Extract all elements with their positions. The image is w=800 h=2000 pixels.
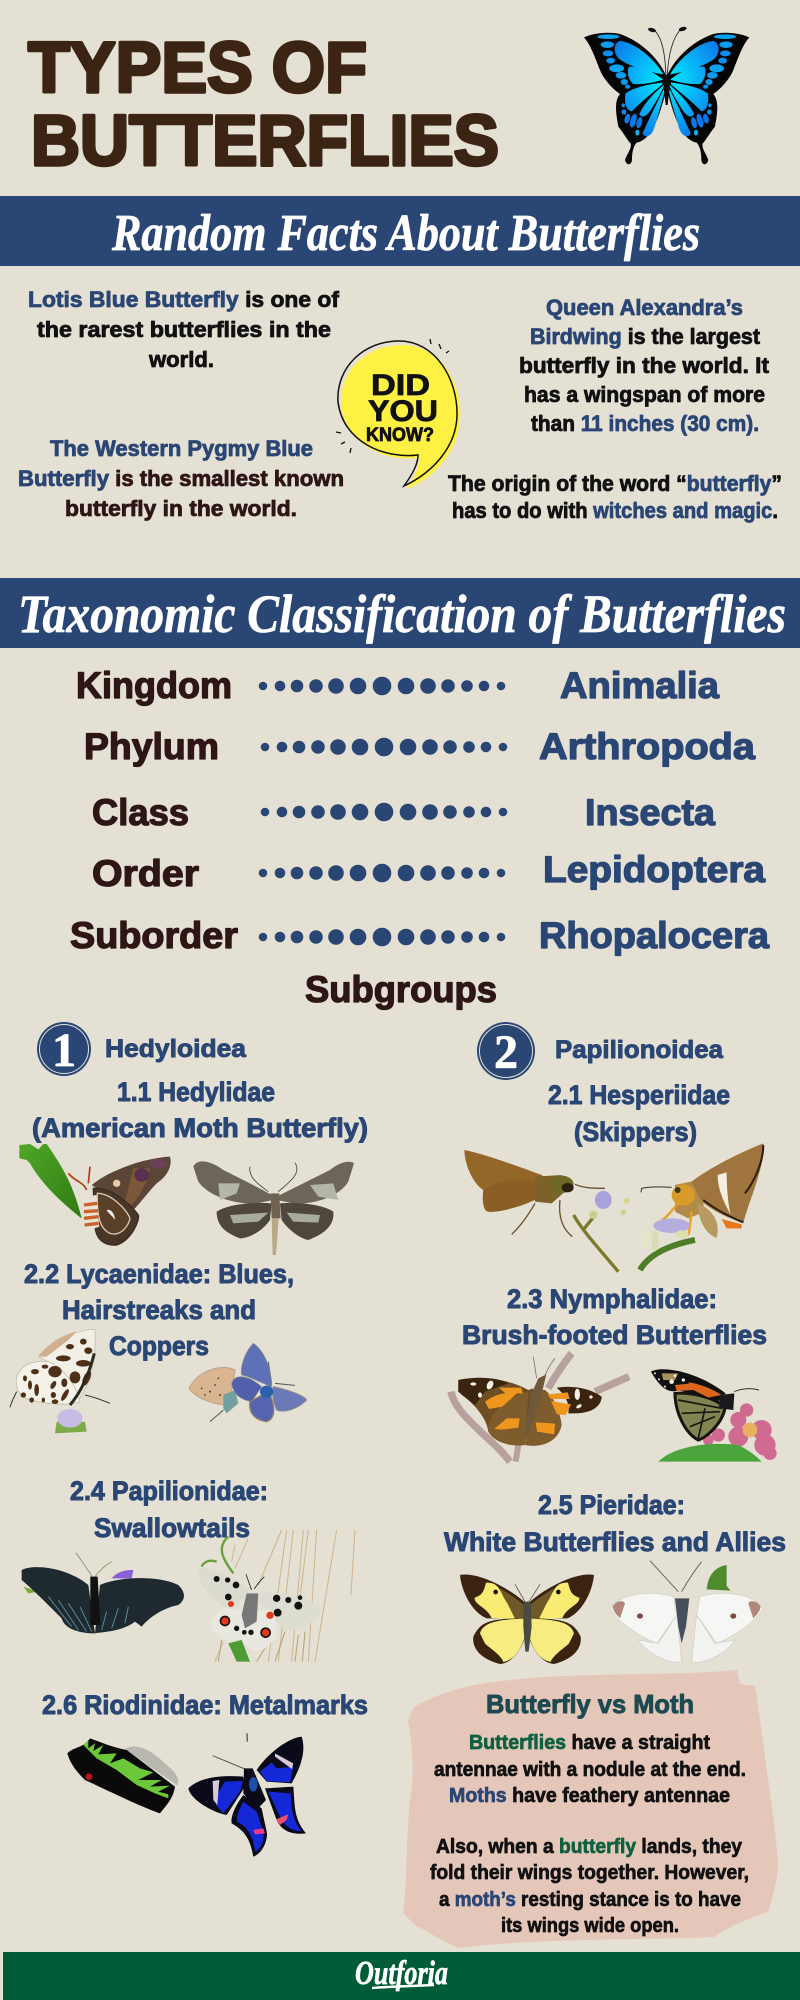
heading: 1.1 Hedylidae: (American Moth Butterfly) <box>32 1113 368 1143</box>
row: order: Order <box>92 853 199 894</box>
heading: 2.2 Lycaenidae: Hairstreaks and <box>62 1295 256 1325</box>
panel text: wings at rest <box>430 1835 749 1937</box>
panel text: wings at rest: a moth’s resting stance is to have <box>439 1888 741 1911</box>
title <box>28 29 499 181</box>
row: suborder: Rhopalocera <box>539 915 769 956</box>
heading: 2.4 Papilionidae: 2.4 Papilionidae: <box>70 1476 268 1506</box>
heading: 1.1 Hedylidae: 1.1 Hedylidae <box>117 1077 275 1107</box>
icon: blue butterfly <box>584 26 749 164</box>
fact: Queen Alexandra's Birdwing: Birdwing is the largest <box>530 324 761 349</box>
heading: 2.1 Hesperiidae: (Skippers) <box>574 1117 697 1147</box>
photo: moth on leaf <box>19 1144 171 1245</box>
row: order: Lepidoptera <box>543 849 765 890</box>
photo: blue metalmark <box>188 1733 306 1857</box>
photo: grey moth <box>193 1161 354 1255</box>
panel text: antennae <box>434 1731 746 1807</box>
heading: 2.2 Lycaenidae: 2.2 Lycaenidae: Blues, <box>24 1259 294 1289</box>
heading: 2.1 Hesperiidae: 2.1 Hesperiidae <box>548 1080 730 1110</box>
fact: Western Pygmy Blue: butterfly in the world. <box>65 496 297 521</box>
row: phylum <box>84 726 755 767</box>
panel text: wings at rest: Also, when a butterfly lands, they <box>436 1835 743 1858</box>
heading: 2.5 Pieridae: 2.5 Pieridae: <box>538 1490 685 1520</box>
row: class <box>92 792 715 833</box>
photo: monarch on milkweed <box>651 1369 777 1462</box>
fact: Queen Alexandra's Birdwing: butterfly in the world. It <box>519 353 770 378</box>
photo: brown nymphalid on branch <box>451 1353 629 1462</box>
fact: Western Pygmy Blue <box>18 436 344 521</box>
row: class: Insecta <box>585 792 715 833</box>
icon: did you know speech bubble: YOU <box>368 395 438 428</box>
panel heading: Butterfly vs Moth <box>486 1689 694 1719</box>
panel text: wings at rest: fold their wings together. However, <box>430 1861 749 1884</box>
row: class: Class <box>92 792 189 833</box>
row: kingdom: Animalia <box>560 665 719 706</box>
heading: 2.3 Nymphalidae <box>462 1284 767 1350</box>
panel text: antennae: Butterflies have a straight <box>469 1731 710 1754</box>
fact: Lotis Blue <box>28 287 340 372</box>
row: kingdom: Kingdom <box>76 665 232 706</box>
badge: 1 Hedyloidea <box>37 1022 247 1077</box>
footer <box>3 1952 800 2000</box>
banner: random facts: Random Facts About Butterflies <box>111 205 700 262</box>
fact: Western Pygmy Blue: The Western Pygmy Blue <box>50 436 313 461</box>
photo: green metalmark <box>67 1738 178 1813</box>
fact: Queen Alexandra's Birdwing: than 11 inches (30 cm). <box>531 411 759 436</box>
fact: Queen Alexandra's Birdwing: Queen Alexandra’s <box>546 295 743 320</box>
panel text: antennae: antennae with a nodule at the end. <box>434 1758 746 1781</box>
heading: 2.1 Hesperiidae <box>548 1080 730 1147</box>
row: suborder: Suborder <box>70 915 238 956</box>
photo: yellow pierid <box>460 1575 594 1664</box>
icon: did you know speech bubble: KNOW? <box>366 425 434 446</box>
title: TYPES OF <box>28 29 367 108</box>
panel text: wings at rest: its wings wide open. <box>501 1914 679 1937</box>
photo: skippers on flowers <box>464 1143 763 1272</box>
fact: origin of the word: The origin of the word “butterfly” <box>448 471 782 496</box>
badge: 2 Papilionoidea: 2 <box>494 1026 518 1079</box>
fact: Western Pygmy Blue: Butterfly is the smallest known <box>18 466 344 491</box>
heading: 2.2 Lycaenidae: Coppers <box>109 1331 209 1361</box>
row: phylum: Phylum <box>84 726 219 767</box>
badge: 2 Papilionoidea <box>477 1022 724 1080</box>
fact: Lotis Blue: world. <box>148 347 214 372</box>
heading: 2.5 Pieridae <box>444 1490 786 1557</box>
photo: spotted lycaenid <box>10 1329 110 1433</box>
row: phylum: Arthropoda <box>539 726 755 767</box>
badge: 2 Papilionoidea: Papilionoidea <box>555 1036 724 1064</box>
heading: 2.4 Papilionidae <box>70 1476 268 1543</box>
badge: 1 Hedyloidea: 1 <box>52 1024 76 1077</box>
heading: 2.3 Nymphalidae: 2.3 Nymphalidae: <box>507 1284 717 1314</box>
fact: origin of the word <box>448 471 782 523</box>
heading: 2.3 Nymphalidae: Brush-footed Butterflies <box>462 1320 767 1350</box>
panel: butterfly vs moth <box>403 1670 778 1948</box>
badge: 1 Hedyloidea: Hedyloidea <box>105 1035 247 1063</box>
row: kingdom <box>76 665 719 706</box>
fact: Lotis Blue: the rarest butterflies in the <box>37 317 331 342</box>
heading: 1.1 Hedylidae <box>32 1077 368 1143</box>
icon: did you know speech bubble <box>336 339 460 489</box>
taxonomy table <box>70 665 769 956</box>
heading: 2.5 Pieridae: White Butterflies and Allies <box>444 1527 786 1557</box>
row: order <box>92 849 765 894</box>
photo: apollo butterfly with grass <box>198 1530 355 1662</box>
heading: subgroups: Subgroups <box>305 969 497 1010</box>
fact: Queen Alexandra's Birdwing: has a wingspan of more <box>524 382 765 407</box>
footer logo: Outforia <box>355 1955 448 1992</box>
fact: origin of the word: has to do with witches and magic. <box>452 498 778 523</box>
row: suborder <box>70 915 769 956</box>
heading: 2.4 Papilionidae: Swallowtails <box>94 1513 250 1543</box>
heading: 2.2 Lycaenidae <box>24 1259 294 1361</box>
fact: Queen Alexandra's Birdwing <box>519 295 770 436</box>
panel text: antennae: Moths have feathery antennae <box>449 1784 730 1807</box>
icon: did you know speech bubble: DID <box>371 369 430 402</box>
photo: black swallowtail <box>22 1553 184 1633</box>
fact: Lotis Blue: Lotis Blue Butterfly is one of <box>28 287 340 312</box>
photo: white pierid <box>611 1561 763 1662</box>
heading: 2.6 Riodinidae: 2.6 Riodinidae: Metalmarks <box>42 1690 368 1720</box>
title: BUTTERFLIES <box>31 102 499 181</box>
photo: blue lycaenid <box>189 1343 307 1422</box>
